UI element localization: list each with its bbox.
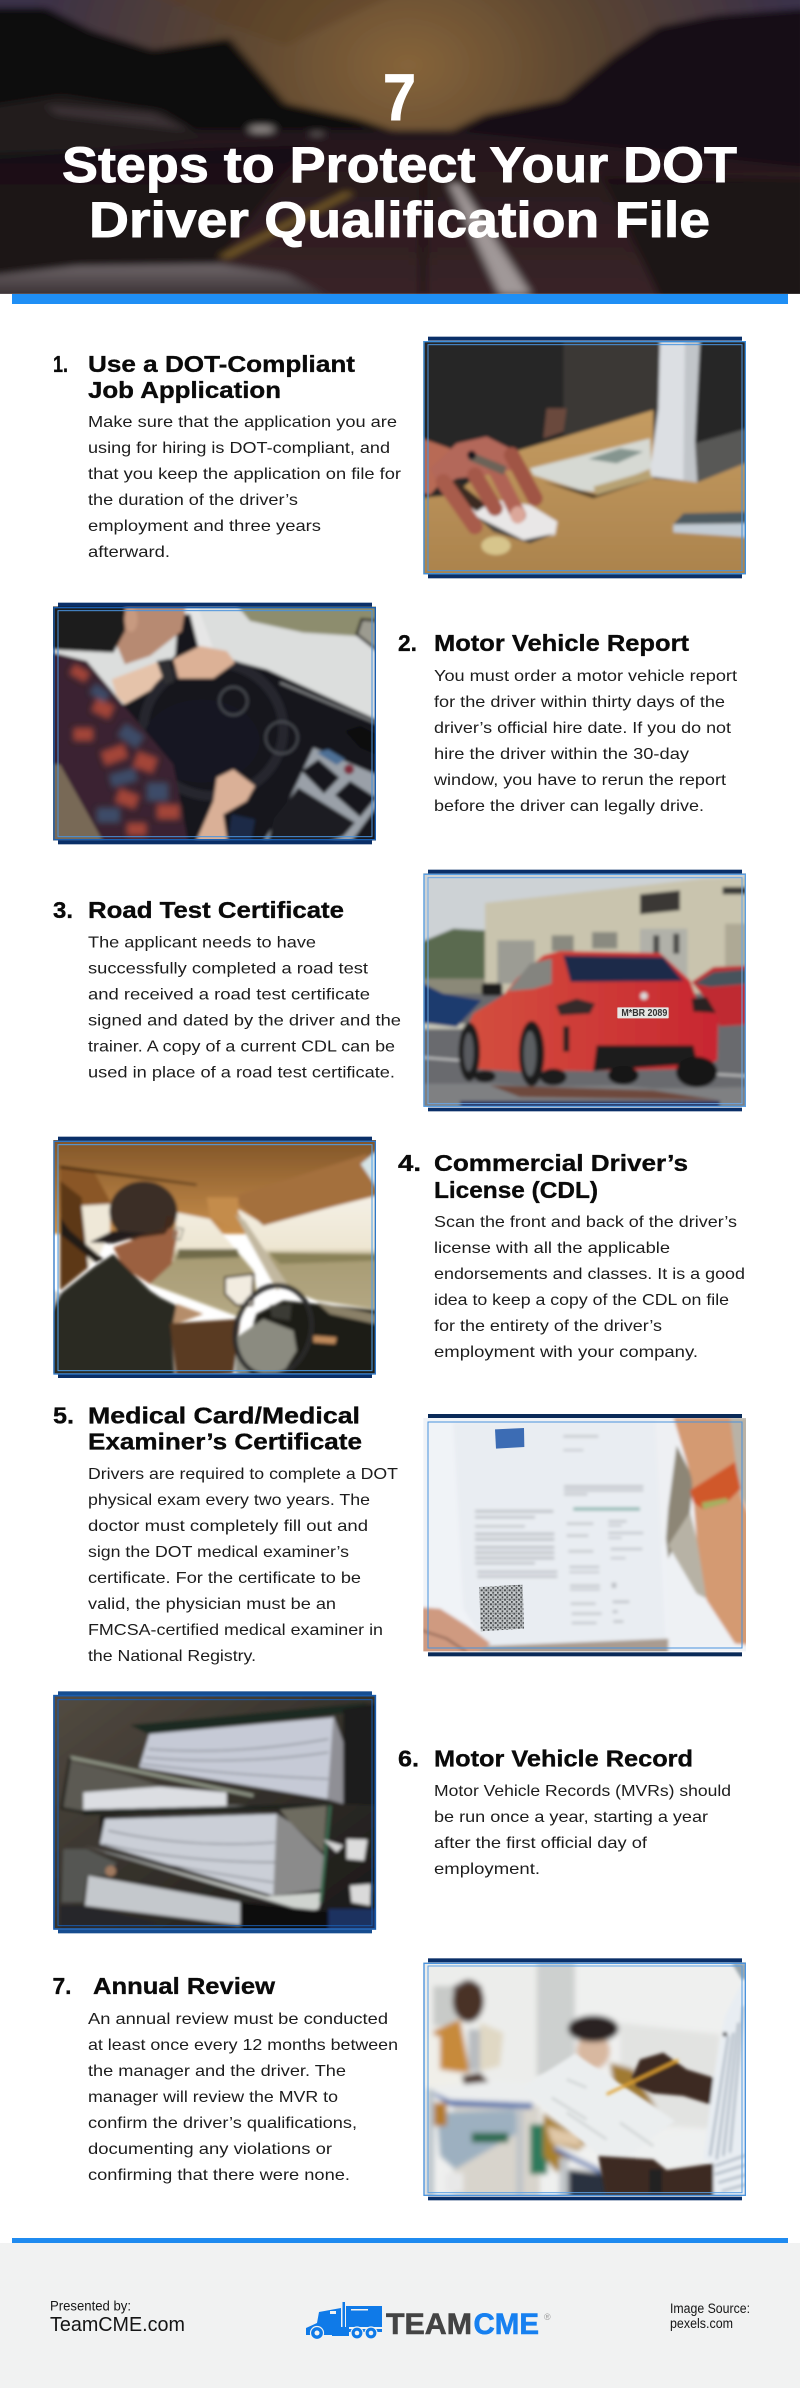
text: step 5 body: sign the DOT medical examiner’s [88, 1544, 349, 1561]
text: presented by: Presented by: [50, 2298, 131, 2314]
frame [424, 870, 745, 1111]
text: step 4 body: idea to keep a copy of the CDL on file [434, 1292, 729, 1309]
heading: step 1 [53, 351, 355, 403]
frame [424, 337, 745, 578]
text: image source [670, 2301, 750, 2331]
heading: step 3: 3. [53, 897, 73, 923]
heading: step 2: Motor Vehicle Report [434, 630, 689, 656]
photo: manager reviewing paper with drivers [413, 1953, 757, 2206]
photo: driver at steering wheel [47, 601, 383, 848]
text: step 5 body: physical exam every two years. The [88, 1492, 370, 1509]
panel: step 4 [47, 1134, 745, 1386]
text: step 6 body: after the first official day of [434, 1835, 648, 1852]
text: step 4 body [434, 1214, 745, 1361]
text: step 2 body: before the driver can legally drive. [434, 798, 704, 815]
text: step 4 body: license with all the applicable [434, 1240, 670, 1257]
heading: step 7: Annual Review [93, 1973, 276, 1999]
text: step 2 body: window, you have to rerun the report [433, 772, 727, 789]
icon: EU flag on certificate [495, 1428, 524, 1449]
logo: TeamCME truck and wordmark: ® [544, 2312, 551, 2322]
text: step 4 body: Scan the front and back of the driver’s [434, 1214, 737, 1231]
heading: step 3: Road Test Certificate [88, 897, 344, 923]
heading: step 4: Commercial Driver’s [434, 1150, 688, 1176]
text: step 2 body: driver’s official hire date. If you do not [434, 720, 732, 737]
text: step 1 body: afterward. [88, 544, 170, 561]
photo: man driving truck [47, 1134, 383, 1386]
title: Driver Qualification File [89, 192, 710, 248]
text: step 7 body: confirm the driver’s qualifications, [88, 2115, 357, 2132]
heading: step 6: 6. [398, 1746, 419, 1772]
header banner with highway photo [0, 0, 800, 306]
photo: highway at dusk [0, 0, 800, 306]
text: step 1 body: Make sure that the application you are [88, 414, 397, 431]
text: step 7 body: confirming that there were none. [88, 2167, 350, 2184]
icon: QR code [479, 1585, 524, 1631]
footer blue bar [12, 2238, 788, 2243]
panel: step 2 [47, 601, 738, 848]
heading: step 4: 4. [398, 1150, 421, 1176]
text: step 7 body: at least once every 12 months between [88, 2037, 398, 2054]
heading: step 5: 5. [53, 1402, 74, 1428]
text: step 3 body: and received a road test certificate [88, 986, 370, 1004]
photo: red car at test track [417, 867, 753, 1114]
text: step 6 body: employment. [434, 1861, 540, 1878]
heading: step 5 [53, 1402, 362, 1454]
text: step 5 body: Drivers are required to complete a DOT [88, 1466, 398, 1483]
text: step 1 body: using for hiring is DOT-compliant, and [88, 440, 390, 457]
licence plate: M*BR 2089 [621, 1008, 668, 1019]
text: step 3 body: used in place of a road test certificate. [88, 1064, 395, 1082]
text: step 5 body: FMCSA-certified medical examiner in [88, 1622, 383, 1639]
text: step 1 body: employment and three years [88, 518, 321, 535]
heading: step 1: Use a DOT-Compliant [88, 351, 355, 377]
text: presented by [50, 2298, 185, 2336]
title [62, 60, 737, 248]
photo: medical certificate held up [417, 1412, 753, 1659]
wordmark: TEAM [386, 2308, 472, 2341]
text: step 5 body [88, 1466, 398, 1665]
heading: step 5: Examiner’s Certificate [88, 1428, 362, 1454]
text: step 5 body: certificate. For the certificate to be [88, 1570, 361, 1587]
logo: TeamCME truck and wordmark [306, 2302, 551, 2341]
text: step 7 body: the manager and the driver. The [88, 2063, 346, 2080]
panel: step 6 [47, 1689, 731, 1936]
panel: footer [0, 2238, 800, 2388]
text: step 6 body [434, 1783, 731, 1878]
panel: step 7 [52, 1953, 757, 2206]
text: step 3 body: The applicant needs to have [88, 934, 316, 952]
title: 7 [383, 60, 416, 134]
heading: step 6: Motor Vehicle Record [434, 1746, 693, 1772]
text: step 4 body: employment with your company. [434, 1344, 698, 1361]
title: Steps to Protect Your DOT [62, 137, 737, 193]
text: step 3 body: successfully completed a road test [88, 960, 369, 978]
heading: step 2: 2. [398, 630, 417, 656]
heading: step 1: Job Application [88, 377, 281, 403]
text: step 7 body: documenting any violations or [88, 2141, 333, 2158]
text: step 5 body: valid, the physician must be an [88, 1596, 336, 1613]
text: step 5 body: doctor must completely fill out and [88, 1518, 368, 1535]
document held by manager [540, 2054, 672, 2146]
text: step 3 body: trainer. A copy of a current CDL can be [88, 1038, 395, 1056]
text: presented by: TeamCME.com [50, 2314, 185, 2336]
text: step 5 body: the National Registry. [88, 1648, 256, 1665]
frame [424, 1958, 745, 2200]
text: step 1 body: the duration of the driver’s [88, 492, 298, 509]
frame [54, 603, 375, 844]
heading: step 5: Medical Card/Medical [88, 1402, 360, 1428]
text: step 7 body: An annual review must be conducted [88, 2011, 388, 2028]
blue header bar [12, 294, 788, 304]
heading: step 4 [398, 1150, 688, 1203]
text: step 3 body [88, 934, 401, 1082]
text: step 3 body: signed and dated by the driver and the [88, 1012, 401, 1030]
text: step 2 body: for the driver within thirty days of the [434, 694, 725, 711]
frame [428, 1414, 742, 1656]
text: step 6 body: Motor Vehicle Records (MVRs) should [434, 1783, 731, 1800]
text: step 4 body: endorsements and classes. It is a good [434, 1266, 745, 1283]
text: step 7 body [88, 2011, 398, 2184]
text: step 7 body: manager will review the MVR to [88, 2089, 338, 2106]
text: step 1 body: that you keep the application on file for [88, 466, 402, 483]
text: step 2 body: You must order a motor vehicle report [434, 668, 738, 685]
text: image source: pexels.com [670, 2316, 733, 2331]
heading: step 7: 7. [52, 1973, 72, 1999]
photo: stacked binders [47, 1689, 383, 1936]
text: step 2 body: hire the driver within the 30-day [434, 746, 689, 763]
panel: step 1 [53, 335, 753, 582]
panel: step 3 [53, 867, 753, 1114]
text: step 2 body [433, 668, 738, 815]
heading: step 4: License (CDL) [434, 1177, 598, 1203]
frame [54, 1691, 375, 1933]
heading: step 1: 1. [53, 351, 68, 377]
photo: hand on mouse at desk [417, 335, 753, 582]
logo: TeamCME truck and wordmark: CME [474, 2308, 539, 2341]
text: step 1 body [88, 414, 402, 561]
icon: truck [306, 2302, 382, 2340]
frame [54, 1137, 375, 1378]
text: image source: Image Source: [670, 2301, 750, 2316]
text: step 6 body: be run once a year, starting a year [434, 1809, 709, 1826]
text: step 4 body: for the entirety of the driver’s [434, 1318, 662, 1335]
panel: step 5 [53, 1402, 753, 1665]
